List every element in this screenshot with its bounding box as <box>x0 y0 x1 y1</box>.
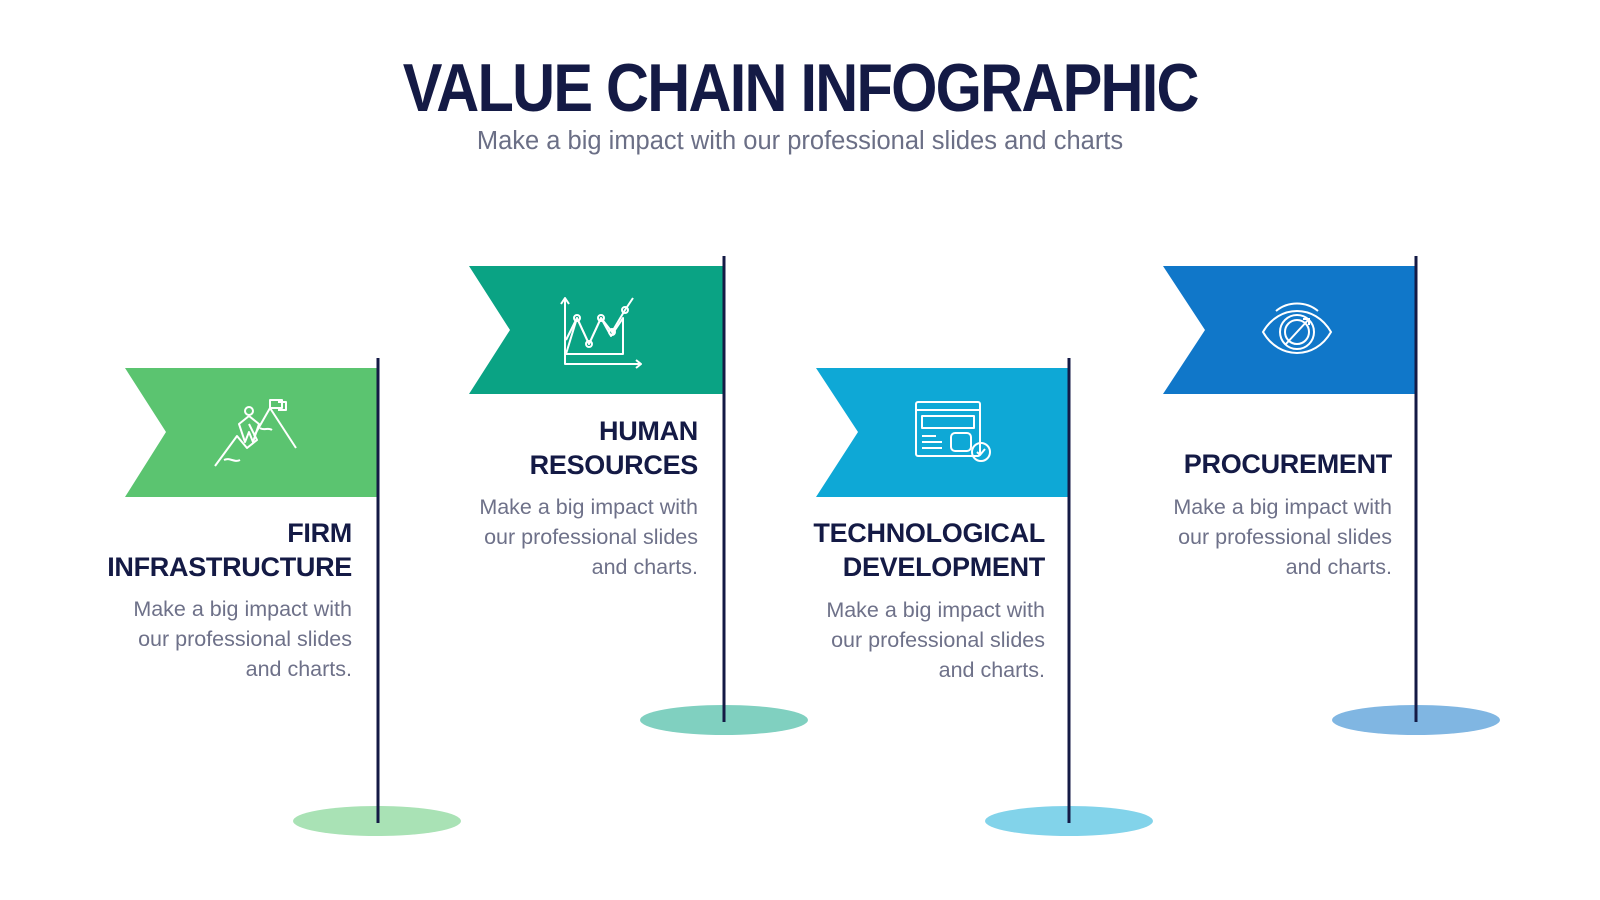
body: Make a big impact with <box>826 598 1045 622</box>
heading: TECHNOLOGICAL <box>813 518 1045 548</box>
heading: DEVELOPMENT <box>843 552 1045 582</box>
body: our professional slides <box>1178 525 1392 549</box>
body: our professional slides <box>138 627 352 651</box>
subtitle: Make a big impact with our professional slides and charts <box>477 127 1123 155</box>
heading: PROCUREMENT <box>1184 449 1392 479</box>
body <box>133 597 352 681</box>
body: Make a big impact with <box>1173 495 1392 519</box>
icon: line chart <box>561 298 641 368</box>
body: and charts. <box>939 658 1045 682</box>
text: technological development <box>813 518 1045 682</box>
flag 4 <box>1163 266 1416 394</box>
body: Make a big impact with <box>479 495 698 519</box>
body <box>826 598 1045 682</box>
text: human resources <box>479 416 698 579</box>
body: our professional slides <box>484 525 698 549</box>
title: VALUE CHAIN INFOGRAPHIC <box>403 50 1197 126</box>
heading: FIRM <box>287 518 352 548</box>
body: our professional slides <box>831 628 1045 652</box>
body <box>1173 495 1392 579</box>
heading: RESOURCES <box>530 450 698 480</box>
body: and charts. <box>246 657 352 681</box>
body: and charts. <box>592 555 698 579</box>
flag 2 <box>469 266 724 394</box>
flag 3 <box>816 368 1069 497</box>
flag 1 <box>125 368 378 497</box>
text: procurement <box>1173 449 1392 579</box>
icon: climber with flag <box>215 400 296 466</box>
icon: web page with badge <box>916 402 990 461</box>
body: Make a big impact with <box>133 597 352 621</box>
body <box>479 495 698 579</box>
heading: HUMAN <box>599 416 698 446</box>
heading <box>530 416 698 480</box>
text: firm infrastructure <box>107 518 352 681</box>
icon: eye with chart <box>1263 304 1331 353</box>
flag poles <box>378 256 1416 823</box>
heading: INFRASTRUCTURE <box>107 552 352 582</box>
body: and charts. <box>1286 555 1392 579</box>
shadow ellipses <box>293 705 1500 836</box>
heading <box>107 518 352 582</box>
heading <box>813 518 1045 582</box>
